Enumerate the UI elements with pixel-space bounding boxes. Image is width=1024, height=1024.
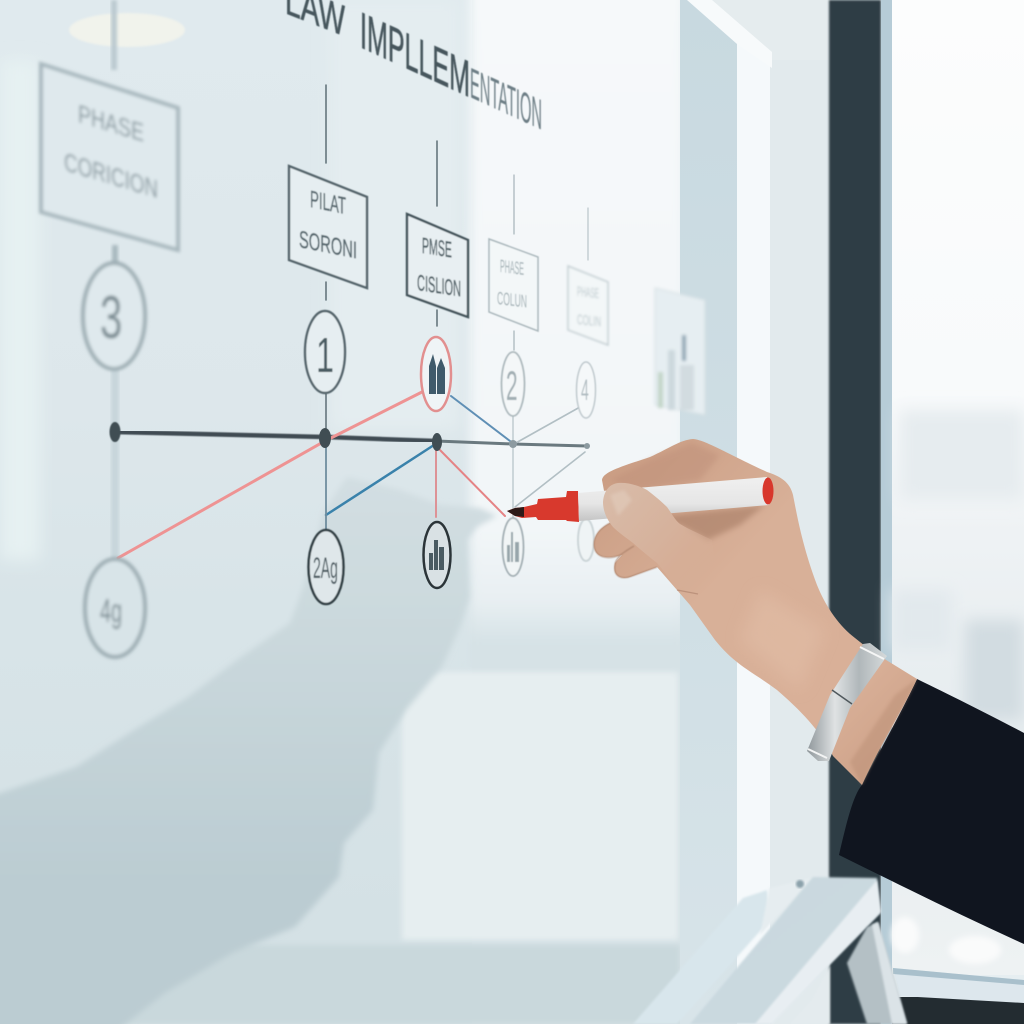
lower circle A [85, 559, 145, 657]
step circle 1 [305, 311, 345, 393]
lower circle E, faint [578, 519, 594, 561]
step circle 2 [502, 352, 524, 416]
title: ENTATION [470, 58, 542, 140]
lower circle B: 2Ag [313, 551, 338, 584]
step circle 4: 4 [581, 373, 589, 406]
whiteboard stand [633, 877, 907, 1024]
step circle 3 [83, 263, 145, 369]
lower circle D with bar icon [502, 518, 524, 576]
step circle 4 [576, 362, 596, 418]
red connector lines [118, 392, 422, 558]
arm shadow reflection on board [0, 477, 497, 1024]
flow diagram drawn on the board [110, 0, 590, 560]
step circle with icon, highlighted red [421, 337, 451, 411]
main horizontal timeline [115, 432, 436, 441]
phase box 2: PMSE [422, 233, 452, 262]
phase box 1: SORONI [299, 227, 357, 265]
phase box 4: PHASE [500, 257, 524, 280]
palm crease [677, 590, 698, 594]
title: IMPLLEM [360, 1, 470, 109]
icon: small bar chart [429, 540, 444, 570]
phase box 2: CISLION [417, 270, 461, 301]
marker end cap [762, 478, 774, 504]
phase box 1 [289, 166, 367, 288]
blue connector lines [326, 445, 434, 515]
marker pen [507, 477, 774, 522]
phase box 3 (out of focus): CORICION [64, 147, 158, 204]
right side of board frame and wall panels [680, 0, 832, 1024]
phase box 4: COLUN [497, 289, 527, 312]
silver bracelet [807, 643, 887, 761]
thumb over marker [603, 483, 716, 590]
phase box 4 [489, 239, 538, 331]
step circle 3: 3 [100, 284, 122, 351]
step circle 1: 1 [316, 327, 334, 383]
blurred window view [891, 0, 1024, 1024]
thumbnail highlight [610, 490, 632, 516]
icon: two bars [429, 354, 445, 394]
marker tip [507, 491, 579, 522]
phase box 3 (out of focus) [41, 64, 178, 250]
lower circle B [308, 530, 344, 604]
dark window frame [829, 0, 892, 1024]
vertical connector lines [326, 85, 588, 520]
wrist highlight [740, 590, 825, 690]
ceiling light reflection [69, 13, 185, 47]
step circle 2: 2 [506, 362, 518, 409]
far left vertical connector [111, 0, 119, 560]
suit sleeve [839, 679, 1024, 944]
title [285, 0, 542, 140]
phase box 1: PILAT [310, 187, 346, 220]
timeline nodes [110, 422, 590, 451]
lower circle A: 4g [100, 592, 122, 629]
lower circle C with bar icon [424, 522, 450, 588]
phase box 3 (out of focus): PHASE [78, 99, 144, 148]
shadow beneath marker [650, 505, 765, 540]
glass board background [0, 0, 690, 1024]
hand and wrist [594, 439, 917, 785]
index finger shading [610, 443, 720, 490]
phase box 5: COLIN [577, 311, 601, 330]
marker body [578, 477, 769, 521]
faded phase box 6 with small chart [655, 288, 705, 415]
grey connector lines [514, 407, 585, 507]
phase box 5: PHASE [577, 283, 599, 302]
lower fingers [594, 522, 657, 578]
phase box 5 [568, 266, 608, 345]
wrist shadow near cuff [850, 679, 917, 785]
phase box 2 [407, 214, 468, 317]
